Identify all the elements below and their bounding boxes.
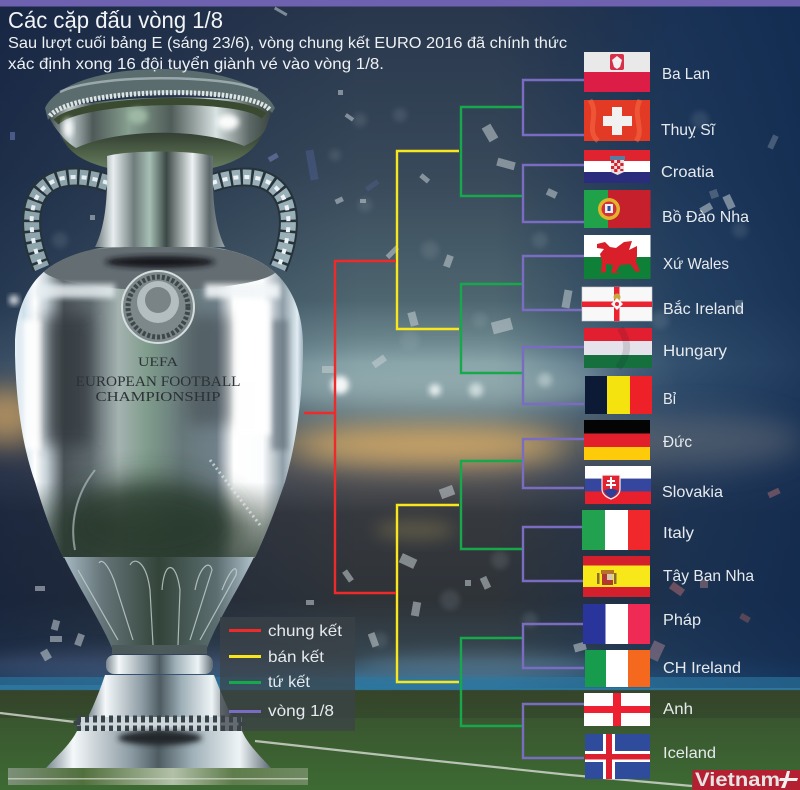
flag: France <box>583 604 650 644</box>
flag: Republic of Ireland <box>585 650 650 687</box>
flag: Spain <box>583 556 650 597</box>
flag: Iceland <box>585 734 650 779</box>
label: Ba Lan: Ba Lan <box>662 66 710 83</box>
label: Hungary: Hungary <box>663 343 727 360</box>
label: Xứ Wales: Xứ Wales <box>663 256 729 273</box>
bracket: round of 16 lines <box>523 80 584 758</box>
flag: England <box>584 693 650 726</box>
label: Thuỵ Sĩ: Thuỵ Sĩ <box>661 122 717 139</box>
bracket: quarter-final lines <box>461 107 522 726</box>
trophy: neck <box>95 152 225 247</box>
legend <box>220 617 355 731</box>
trophy: left rope handle <box>32 177 108 268</box>
intro text: Sau lượt cuối bảng E (sáng 23/6), vòng chung kết EURO 2016 đã chính thức <box>8 35 567 52</box>
legend: chung kết <box>268 623 343 640</box>
legend: bán kết <box>268 649 325 666</box>
label: Pháp: Pháp <box>663 612 701 629</box>
label: Bồ Đào Nha: Bồ Đào Nha <box>662 209 749 226</box>
label: Italy: Italy <box>663 525 694 542</box>
title: Các cặp đấu vòng 1/8 <box>8 7 223 33</box>
trophy: right rope handle <box>212 177 288 268</box>
intro text: xác định xong 16 đội tuyển giành vé vào vòng 1/8. <box>8 55 384 73</box>
flag: Poland <box>584 52 650 92</box>
flag: Switzerland <box>584 100 650 141</box>
intro text <box>8 35 567 73</box>
label: Bỉ: Bỉ <box>663 391 676 408</box>
flag: Germany <box>584 420 650 460</box>
trophy: engraved text: UEFA <box>138 354 179 369</box>
flag: Portugal <box>584 190 650 228</box>
label: Anh: Anh <box>663 701 693 718</box>
legend: tứ kết <box>268 674 311 691</box>
label: CH Ireland: CH Ireland <box>663 660 741 677</box>
trophy <box>8 69 308 785</box>
label: Slovakia: Slovakia <box>662 484 723 501</box>
trophy: lower cone <box>63 552 255 648</box>
bracket: final lines <box>304 261 396 593</box>
flag: Belgium <box>585 376 652 414</box>
flag: Italy <box>582 510 650 550</box>
label: Đức: Đức <box>663 434 692 451</box>
flag: Slovakia <box>585 466 651 504</box>
trophy: engraved text: EUROPEAN FOOTBALL <box>76 374 240 390</box>
label: Iceland: Iceland <box>663 745 716 762</box>
background: confetti <box>10 7 781 662</box>
trophy: engraved text <box>76 354 240 405</box>
trophy: engraved text: CHAMPIONSHIP <box>96 390 221 405</box>
background: soft bokeh spots <box>52 108 748 648</box>
legend: vòng 1/8 <box>268 703 334 720</box>
flag: Croatia <box>584 150 650 183</box>
label: Tây Ban Nha: Tây Ban Nha <box>663 568 754 585</box>
flag: Wales <box>584 235 650 279</box>
flag: Hungary <box>584 328 652 368</box>
flag: Northern Ireland <box>582 287 652 321</box>
top purple bar <box>0 0 800 6</box>
trophy: lid <box>45 69 275 173</box>
trophy: collar and foot <box>8 645 308 785</box>
label: Bắc Ireland: Bắc Ireland <box>663 299 744 318</box>
trophy: main body <box>15 245 303 571</box>
logo: Vietnam+ <box>692 770 800 790</box>
trophy: UEFA emblem <box>122 271 194 343</box>
label: Croatia: Croatia <box>661 164 714 181</box>
bracket: semi-final lines <box>397 151 459 682</box>
